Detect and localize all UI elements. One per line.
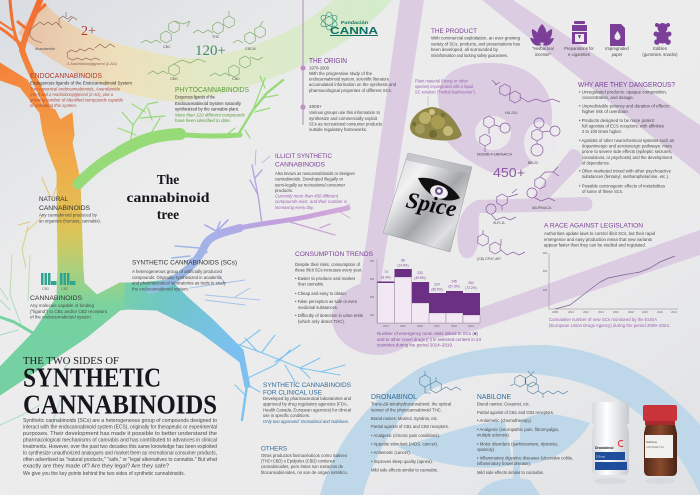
text: phytocannabinoids (175, 87, 249, 123)
timeline: the origin: endocannabinoid system, scientific literature (309, 76, 389, 82)
text: synthetic cannabinoids for clinical use: FOR CLINICAL USE (263, 390, 323, 396)
tree: clinical blue branch (225, 330, 345, 420)
heading: the cannabinoid tree: The (157, 172, 179, 187)
text: others (261, 446, 348, 475)
labels: product icons: e-cigarettes (568, 52, 590, 57)
text: consumption trends: these illicit SCs increases every year. (295, 268, 362, 272)
intro paragraph: Synthetic cannabinoids (SCs) are a heterogeneous group of compounds designed to (23, 418, 217, 424)
text: consumption trends: • Easier to produce and market (295, 276, 356, 281)
text: why are they dangerous (578, 80, 675, 194)
caption: bar chart (377, 331, 481, 348)
text: synthetic cannabinoids for clinical use: approved by drug regulatory agencies (FDA, (263, 402, 348, 406)
text: why are they dangerous: • Possible carcinogenic effects of metabolites (579, 184, 666, 188)
label: endocannabinoid molecules: 2-Arachidonoylglycerol (2-AG) (67, 62, 117, 66)
labels: illicit molecules: HU-210 (505, 111, 517, 115)
labels: product icons: Impregnated (605, 46, 629, 51)
intro paragraph: pharmacological mechanisms of cannabis and has contributed to advances in clinical (23, 438, 217, 444)
timeline: the origin: SCs as recreational consumer products (309, 122, 383, 126)
text: natural cannabinoids: NATURAL (39, 196, 68, 203)
icon: CB1 and CB2 receptors: CB2 (61, 287, 68, 291)
line chart: cumulative new SCs: 2020 (642, 310, 648, 314)
title (23, 356, 217, 420)
text: nabilone: multiple sclerosis). (477, 432, 510, 438)
timeline: the origin: With the progressive study of the (309, 71, 372, 76)
label: endocannabinoid molecules (35, 47, 117, 66)
text: synthetic cannabinoids for clinical use: Developed by pharmaceutical laboratories and (263, 396, 351, 401)
text: others: cannabinoides, pero éstos son extractos de (261, 464, 344, 469)
text: cannabinoids: CANNABINOIDS (30, 295, 83, 302)
text: why are they dangerous: 2 to 100 times higher. (582, 129, 622, 134)
text: synthetic cannabinoids: and pharmaceutical laboratories as tools to study (132, 280, 227, 286)
text: endocannabinoids: of activating this system. (30, 103, 77, 108)
text: dronabinol: DRONABINOL (371, 394, 417, 401)
text: others: (THC+CBD) o Epidyolex (CBD) contienen (261, 458, 336, 464)
text: why are they dangerous: of dependence. (582, 160, 610, 166)
text: synthetic cannabinoids: the endocannabinoid system. (132, 286, 189, 292)
line chart: cumulative new SCs: 2016 (613, 310, 619, 314)
labels: product icons (532, 46, 678, 57)
caption: bar chart: Number of emergency room visits linked to SCs (■) (377, 331, 478, 336)
text: endocannabinoids (30, 73, 132, 108)
text: others: OTHERS (261, 446, 288, 452)
text: the product: variety of SCs, products, and presentations has (431, 42, 521, 46)
bar chart: emergency room visits: 74 (384, 270, 388, 274)
molecules: endocannabinoids (30, 12, 115, 60)
caption: bar chart: and to other novel drugs (□) in selected centers in 24 (377, 337, 481, 342)
text: synthetic cannabinoids for clinical use: SYNTHETIC CANNABINOIDS (263, 382, 352, 389)
bar chart: emergency room visits: 233 (417, 271, 423, 275)
heading: the cannabinoid tree: tree (157, 207, 179, 222)
labels: illicit molecules: AB-PINACA (532, 206, 552, 210)
text: nabilone: • Antiemetic (chemotherapy). (477, 418, 532, 423)
text: phytocannabinoids: PHYTOCANNABINOIDS (175, 87, 249, 94)
labels: product icons: Edibles (653, 46, 667, 51)
molecule: nabilone (510, 371, 568, 398)
image: dronabinol bottle: 2.5 mg (596, 454, 605, 458)
text: nabilone: spasticity). (477, 447, 495, 452)
image: Spice packet: Spice (404, 187, 459, 222)
text: nabilone: • Analgesic (neuropathic pain, fibromyalgia, (477, 427, 559, 432)
logo: Fundación CANNA: CANNA (330, 26, 378, 37)
text: a race against legislation: emergence and easy production mean that new variants (544, 237, 653, 242)
text: phytocannabinoids: have been identified to date. (175, 118, 231, 123)
image: Spice packet (383, 153, 472, 252)
labels: phytocannabinoid molecules: THC (212, 35, 220, 39)
bar chart: emergency room visits: 2016 (417, 324, 423, 328)
image: dronabinol bottle (592, 402, 629, 484)
text: consumption trends: than cannabis. (298, 282, 324, 286)
bar chart: emergency room visits: (49.9%) (414, 276, 426, 280)
text: synthetic cannabinoids for clinical use: Health Canada, European agencies) for clinical (263, 408, 351, 412)
bar chart: emergency room visits: (67.3%) (448, 284, 460, 288)
text: consumption trends: Despite their risks, consumption of (295, 262, 361, 267)
tree: synthetic branch (125, 280, 250, 387)
text: a race against legislation: appear faster than they can be studied and regulated. (544, 242, 646, 248)
icon: herbal tea lotus (530, 24, 554, 46)
line chart: cumulative new SCs (543, 251, 678, 314)
tree: illicit synthetic branch (150, 150, 350, 305)
timeline: the origin: outside regulatory frameworks. (309, 127, 367, 132)
image: plant material (410, 107, 462, 140)
labels: phytocannabinoid molecules: CBC (163, 45, 171, 49)
intro paragraph: interact with the endocannabinoid system (ECS), originally for therapeutic or experimental (23, 424, 217, 430)
labels: product icons: paper (612, 52, 623, 57)
tree: phytocannabinoid branch (78, 76, 283, 184)
line chart: cumulative new SCs: 2008 (552, 310, 558, 314)
count: 450+: 450+ (493, 165, 525, 180)
text: nabilone (477, 394, 573, 475)
timeline: the origin: 1970-2000 (309, 66, 329, 70)
title: CANNABINOIDS (23, 390, 217, 420)
text: why are they dangerous: full agonists of ECS receptors, with affinities (582, 124, 665, 128)
caption: plant material (415, 78, 476, 106)
text: a race against legislation: Authorities update laws to control illicit SCs, but their rapid (544, 231, 655, 236)
text: dronabinol: isomer of the phytocannabinoid THC. (371, 408, 442, 412)
text: why are they dangerous: • Products designed to be more potent: (579, 118, 655, 123)
icon: e-cigarette cartridge (572, 21, 587, 44)
text: dronabinol: Trans-Δ9-tetrahydrocannabinol, the optical (371, 402, 451, 406)
text: illicit synthetic cannabinoids: cannabinoids. Developed illegally or (275, 176, 343, 182)
line chart: cumulative new SCs: 900 (543, 251, 548, 255)
count: 120+: 120+ (195, 43, 226, 59)
molecules: illicit synthetic cannabinoids (478, 80, 560, 255)
bar chart: emergency room visits: 500 (370, 277, 375, 281)
text: natural cannabinoids: CANNABINOIDS (39, 205, 91, 212)
text: nabilone: • Motor disorders (parkinsonism, dystonia, (477, 442, 558, 446)
heading: the cannabinoid tree: cannabinoid (126, 190, 210, 205)
text: endocannabinoids: Endogenous ligands of the Endocannabinoid System (30, 80, 132, 86)
labels: phytocannabinoid molecules: CBG (170, 77, 178, 81)
title: SYNTHETIC (23, 362, 161, 392)
timeline: the origin: accumulated information on the synthesis and (309, 82, 396, 87)
icon: CB1 and CB2 receptors: CB1 (42, 287, 49, 291)
text: cannabinoids (30, 295, 108, 320)
text: cannabinoids: Any molecule capable of binding (30, 303, 94, 308)
caption: line chart (549, 317, 670, 328)
text: natural cannabinoids: an organism (humans, cannabis). (39, 218, 101, 224)
text: consumption trends: • Difficulty of detection in urine tests (295, 313, 364, 318)
text: why are they dangerous: dopaminergic and serotonergic pathways: more (582, 144, 672, 148)
timeline: the origin: pharmacological properties of different SCs. (309, 88, 392, 93)
caption: plant material: species) impregnated with a liquid (415, 84, 473, 89)
logo: Fundación CANNA (319, 12, 378, 37)
text: nabilone: Mild side effects similar to cannabis. (477, 470, 544, 475)
text: why are they dangerous: substances (fentanyl, methamphetamine, etc.). (582, 174, 669, 179)
line chart: cumulative new SCs: 2012 (583, 310, 589, 314)
text: the product (431, 28, 521, 58)
text: synthetic cannabinoids for clinical use (263, 382, 352, 424)
labels: illicit molecules: BB-22 (528, 161, 538, 165)
text: synthetic cannabinoids (132, 260, 237, 292)
text: cannabinoids: of the endocannabinoid system. (30, 314, 92, 320)
line chart: cumulative new SCs: 600 (543, 269, 548, 273)
timeline: the origin: Various groups use this information to (309, 110, 380, 115)
bar chart: emergency room visits: (8.4%) (381, 276, 391, 280)
image: nabilone bottle: CAS 51022-71-0 (646, 446, 664, 449)
bar chart: emergency room visits: 100 (370, 313, 375, 317)
text: others: fitocannabinoides, no son de origen sintético. (261, 470, 348, 475)
caption: plant material: Plant material (hemp or other (415, 78, 468, 84)
text: the product: misinformation and lacking safety guarantees. (431, 53, 508, 58)
text: a race against legislation: A RACE AGAINST LEGISLATION (544, 222, 643, 230)
text: synthetic cannabinoids for clinical use: Only two approved: Dronabinol and Nabilone. (263, 419, 349, 424)
text: natural cannabinoids: Any cannabinoid produced by (39, 212, 98, 218)
bar chart: emergency room visits: 2019 (468, 324, 474, 328)
tree: main trunk (0, 0, 350, 425)
text: dronabinol: • Analgesic (chronic pain conditions). (371, 433, 440, 438)
text: why are they dangerous: concentration, and dosage. (582, 95, 634, 100)
bar chart: emergency room visits: 700 (370, 259, 375, 263)
bar chart: emergency room visits: (66.5%) (431, 288, 443, 292)
text: why are they dangerous: of some of these SCs. (582, 189, 623, 194)
label: endocannabinoid molecules: Anandamide (35, 47, 55, 51)
text: dronabinol: Partial agonist of CB1 and CB2 receptors. (371, 424, 449, 429)
text: the product: THE PRODUCT (431, 28, 477, 35)
background medical arc and caduceus (320, 345, 700, 495)
text: illicit synthetic cannabinoids: Currently more than 450 different (275, 194, 339, 198)
text: dronabinol: Mild side effects similar to cannabis. (371, 468, 438, 472)
intro paragraph: exactly are they made of? Are they legal? Are they safe? (23, 464, 169, 470)
text: consumption trends: • False perception as safe or even (295, 299, 357, 304)
icon: CB1 and CB2 receptors (41, 273, 76, 291)
caption: line chart: Cumulative number of new SCs monitored by the EUDA (549, 317, 658, 322)
text: endocannabinoids: ENDOCANNABINOIDS (30, 73, 102, 80)
intro paragraph: purposes. Their development has made it possible to better understand the (23, 431, 217, 437)
molecule: dronabinol (420, 371, 461, 393)
text: why are they dangerous: • Unregulated products: opaque composition, (579, 90, 667, 94)
text: natural cannabinoids (39, 196, 101, 224)
bar chart: emergency room visits: 245 (451, 280, 457, 284)
count: 2+: 2+ (81, 24, 96, 39)
labels: illicit molecules: (C8) CP47,497 (477, 257, 501, 261)
image: nabilone bottle: Nabilone (646, 440, 657, 444)
bar chart: emergency room visits: 89 (401, 258, 405, 262)
text: why are they dangerous: WHY ARE THEY DANGEROUS? (578, 80, 675, 89)
labels: illicit molecules (477, 111, 552, 261)
logo: Fundación CANNA: Fundación (341, 20, 368, 25)
timeline: the origin (300, 0, 396, 132)
text: consumption trends: • Cheap and easy to obtain. (295, 291, 347, 296)
text: consumption trends: medicinal substances. (298, 305, 338, 310)
title: THE TWO SIDES OF (23, 356, 119, 367)
caption: line chart: (European Union Drugs Agency) during the period 2008–2024. (549, 323, 670, 328)
text: illicit synthetic cannabinoids: Also known as neocannabinoids or designer (275, 171, 355, 176)
text: consumption trends: (which only detect THC). (298, 319, 345, 324)
text: nabilone: inflammatory bowel disease). (477, 461, 531, 466)
caption: plant material: SC solution ("herbal tea/incense"). (415, 90, 476, 94)
text: why are they dangerous: • Unpredictable potency and duration of effects: (579, 104, 670, 108)
line chart: cumulative new SCs: 2024 (671, 310, 677, 314)
line chart: cumulative new SCs: 2010 (568, 310, 574, 314)
text: cannabinoids: ("ligand") to CB1 and/or CB2 receptors (30, 309, 108, 314)
labels: phytocannabinoid molecules: CBCM (245, 47, 256, 51)
timeline: the origin: 2000+ (309, 104, 322, 109)
bar chart: emergency room visits: 2018 (451, 324, 457, 328)
line chart: cumulative new SCs: 300 (543, 288, 548, 292)
text: nabilone: Brand names: Cesamet, etc. (477, 402, 530, 406)
text: illicit synthetic cannabinoids (275, 153, 355, 210)
text: why are they dangerous: • Agonists of other neurochemical systems such as (579, 138, 675, 143)
timeline: the origin: THE ORIGIN (309, 58, 347, 65)
line chart: cumulative new SCs: 2018 (628, 310, 634, 314)
icon: impregnated paper (610, 24, 625, 46)
text: phytocannabinoids: Exogenous ligands of the (175, 94, 215, 100)
text: dronabinol: Brand names: Marinol, Syndros, etc. (371, 416, 438, 421)
bar chart: emergency room visits: (72.2%) (465, 286, 477, 290)
text: synthetic cannabinoids: compounds. Originally synthesized in academic (132, 275, 223, 280)
text: the product: been developed, all surrounded by (431, 47, 499, 52)
intro paragraph: often advertised as "natural products," "safe," or "legal alternatives to cannabis." But what (23, 457, 218, 463)
line chart: cumulative new SCs: 2022 (657, 310, 663, 314)
text: nabilone: NABILONE (477, 394, 511, 401)
text: illicit synthetic cannabinoids: CANNABINOIDS (275, 162, 326, 168)
text: dronabinol (371, 394, 451, 472)
text: endocannabinoids: (AEA) and 2-Arachidonoylglycerol (2-AG), plus a (30, 92, 113, 97)
caption: bar chart: countries during the period 2014–2019. (377, 342, 453, 348)
text: dronabinol: • Antiemetic (cancer). (371, 450, 411, 455)
labels: phytocannabinoid molecules: CBD (232, 77, 240, 81)
labels: illicit molecules: XLR-11 (493, 221, 505, 225)
text: dronabinol: • Appetite stimulant (AIDS, cancer). (371, 442, 438, 446)
text: illicit synthetic cannabinoids: increasing every day. (275, 205, 314, 210)
text: dronabinol: • Improves sleep quality (apnea). (371, 459, 433, 464)
text: consumption trends (295, 251, 373, 324)
background arc band (18, 0, 392, 102)
text: illicit synthetic cannabinoids: semi-legally as recreational consumer (275, 182, 345, 188)
icon: gummy bear (654, 23, 672, 45)
text: synthetic cannabinoids: A heterogeneous group of artificially produced (132, 269, 222, 274)
heading: the cannabinoid tree (126, 172, 210, 222)
labels: illicit molecules: MDMB-FUBINACA (477, 152, 513, 156)
labels: product icons: incense" (535, 52, 551, 57)
bar chart: emergency room visits: 2017 (434, 324, 440, 328)
text: why are they dangerous: prone to severe side effects (epileptic seizures, (582, 149, 672, 154)
intro paragraph: We give you the key points behind the two sides of synthetic cannabinoids. (23, 471, 185, 477)
text: nabilone: Partial agonist of CB1 and CB2 receptors. (477, 410, 554, 415)
text: why are they dangerous: • Often marketed mixed with other psychoactive (579, 168, 671, 174)
intro paragraph: treatments. However, over the past two decades this same knowledge has been exploited (23, 444, 217, 450)
skull and crossbones watermark (332, 0, 700, 355)
text: phytocannabinoids: synthesized by the cannabis plant. (175, 106, 239, 112)
bar chart: emergency room visits (370, 258, 480, 328)
molecules: phytocannabinoids (141, 11, 265, 77)
labels: product icons: Preparations for (564, 46, 595, 51)
text: why are they dangerous: convulsions, or psychosis) and the development (582, 155, 673, 160)
labels: product icons: "Herbal tea/ (532, 46, 555, 51)
text: endocannabinoids: Two canonical endocannabinoids, Anandamide (30, 86, 120, 92)
text: consumption trends: CONSUMPTION TRENDS (295, 251, 373, 258)
text: phytocannabinoids: Endocannabinoid System naturally (175, 101, 242, 106)
intro paragraph (23, 418, 218, 477)
text: why are they dangerous: higher risk of overdose. (582, 109, 629, 114)
text: the product: With commercial exploitation, an ever-growing (431, 36, 520, 40)
bar chart: emergency room visits: 224 (434, 282, 440, 286)
text: endocannabinoids: growing number of identified compounds capable (30, 98, 123, 102)
bar chart: emergency room visits: 2014 (383, 324, 389, 328)
text: illicit synthetic cannabinoids: products. (275, 188, 293, 193)
bar chart: emergency room visits: (14.9%) (397, 264, 409, 268)
bar chart: emergency room visits: 2015 (400, 324, 406, 328)
text: illicit synthetic cannabinoids: compounds exist, and their number is (275, 199, 348, 204)
bar chart: emergency room visits: 300 (370, 295, 375, 299)
text: a race against legislation (544, 222, 655, 248)
line chart: cumulative new SCs: 2014 (598, 310, 604, 314)
text: synthetic cannabinoids: SYNTHETIC CANNABINOIDS (SCs) (132, 260, 237, 266)
text: illicit synthetic cannabinoids: ILLICIT SYNTHETIC (275, 153, 332, 160)
text: others: Otros productos farmacéuticos como Sativex (261, 453, 348, 458)
intro paragraph: to synthesize unauthorized analogues and market them as recreational consumer products, (23, 450, 217, 456)
text: nabilone: • Inflammatory digestive diseases (ulcerative colitis, (477, 456, 573, 460)
text: synthetic cannabinoids for clinical use: use in specific conditions. (263, 413, 310, 418)
image: nabilone bottle (643, 405, 677, 484)
bar chart: emergency room visits: 254 (468, 281, 474, 285)
text: phytocannabinoids: More than 120 different compounds (175, 112, 246, 118)
image: dronabinol bottle: Dronabinol (595, 446, 613, 450)
timeline: the origin: synthesize and commercially exploit (309, 116, 378, 121)
labels: product icons: (gummies, snacks) (642, 52, 678, 57)
labels: phytocannabinoid molecules (163, 35, 256, 81)
